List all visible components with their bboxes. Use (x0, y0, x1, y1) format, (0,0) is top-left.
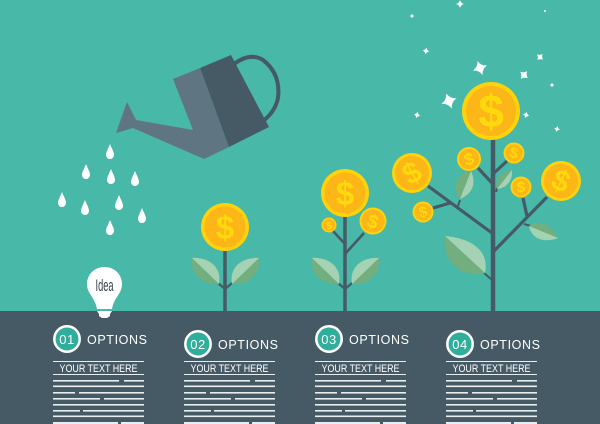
plant 2: three coins: $ (364, 211, 381, 234)
number badge 01: 01 (59, 332, 75, 347)
subheading: YOUR TEXT HERE (322, 363, 400, 375)
icon: watering can (116, 55, 278, 159)
number badge 02: 02 (190, 337, 206, 352)
placeholder text lines (446, 380, 537, 424)
option 2 (184, 331, 278, 424)
placeholder text lines (53, 380, 144, 424)
heading: OPTIONS (349, 333, 409, 347)
plant 3: money tree (392, 82, 581, 311)
option 1 (53, 326, 147, 424)
sparkling stars (410, 0, 561, 133)
water drops (58, 144, 146, 235)
plant 3: money tree: $ (462, 149, 477, 170)
plant 2: three coins: $ (336, 175, 354, 212)
option 4 (446, 331, 540, 424)
heading: OPTIONS (87, 333, 147, 347)
plant 3: money tree: $ (517, 179, 526, 196)
plant 3: money tree: $ (418, 203, 429, 222)
heading: OPTIONS (218, 338, 278, 352)
number badge 04: 04 (452, 337, 468, 352)
heading: OPTIONS (480, 338, 540, 352)
plant 2: three coins (312, 169, 386, 311)
plant 2: three coins: $ (325, 220, 334, 232)
number badge 03: 03 (321, 332, 337, 347)
plant 3: money tree: $ (478, 85, 504, 137)
plant 1: single coin (192, 203, 259, 311)
placeholder text lines (184, 380, 275, 424)
subheading: YOUR TEXT HERE (60, 363, 138, 375)
plant 3: money tree: $ (397, 155, 428, 192)
icon: idea light bulb (87, 267, 122, 318)
subheading: YOUR TEXT HERE (190, 363, 268, 375)
ground band (0, 311, 600, 424)
plant 1: single coin: $ (216, 209, 234, 246)
plant 3: money tree: $ (508, 144, 521, 163)
icon: idea light bulb: Idea (96, 276, 114, 295)
plant 3: money tree: $ (546, 163, 576, 200)
subheading: YOUR TEXT HERE (452, 363, 530, 375)
placeholder text lines (315, 380, 406, 424)
option 3 (315, 326, 409, 424)
